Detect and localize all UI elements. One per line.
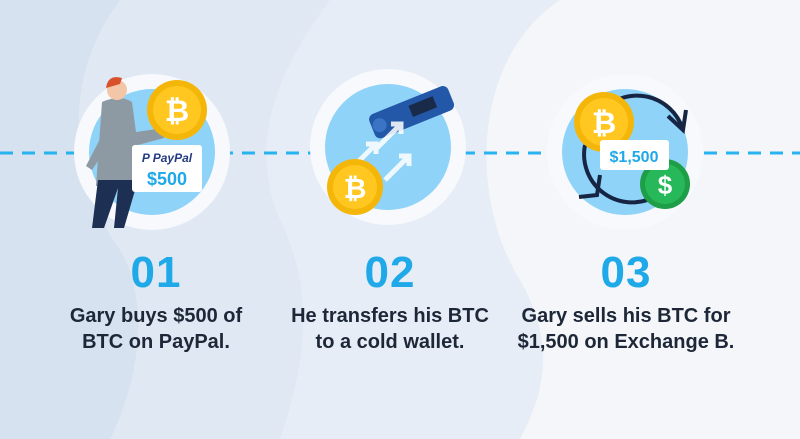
- text step 1: Gary buys $500 of: [70, 305, 242, 327]
- text step 2: He transfers his BTC: [291, 305, 489, 327]
- text step 2: [291, 305, 489, 353]
- icon: step 3 exchange: $: [658, 170, 673, 200]
- number 02: 02: [365, 248, 415, 297]
- text step 1: BTC on PayPal.: [82, 331, 230, 353]
- text step 3: $1,500 on Exchange B.: [518, 331, 734, 353]
- icon: step 3 exchange: [550, 89, 695, 215]
- text step 3: [518, 305, 734, 353]
- icon: step 1 person buying bitcoin: $500: [147, 169, 187, 189]
- icon: step 3 exchange: ₿: [592, 107, 616, 140]
- text step 1: [70, 305, 242, 353]
- icon: step 3 exchange: $1,500: [610, 149, 659, 166]
- text step 3: Gary sells his BTC for: [522, 305, 730, 327]
- number 03: 03: [601, 248, 651, 297]
- number 01: 01: [131, 248, 181, 297]
- icon: step 1 person buying bitcoin: ₿: [165, 95, 189, 128]
- icon: step 2 cold wallet: ₿: [344, 173, 366, 204]
- icon: step 1 person buying bitcoin: [74, 74, 230, 230]
- icon: step 2 cold wallet: [310, 69, 466, 225]
- icon: step 1 person buying bitcoin: P PayPal: [142, 151, 193, 165]
- text step 2: to a cold wallet.: [316, 331, 464, 353]
